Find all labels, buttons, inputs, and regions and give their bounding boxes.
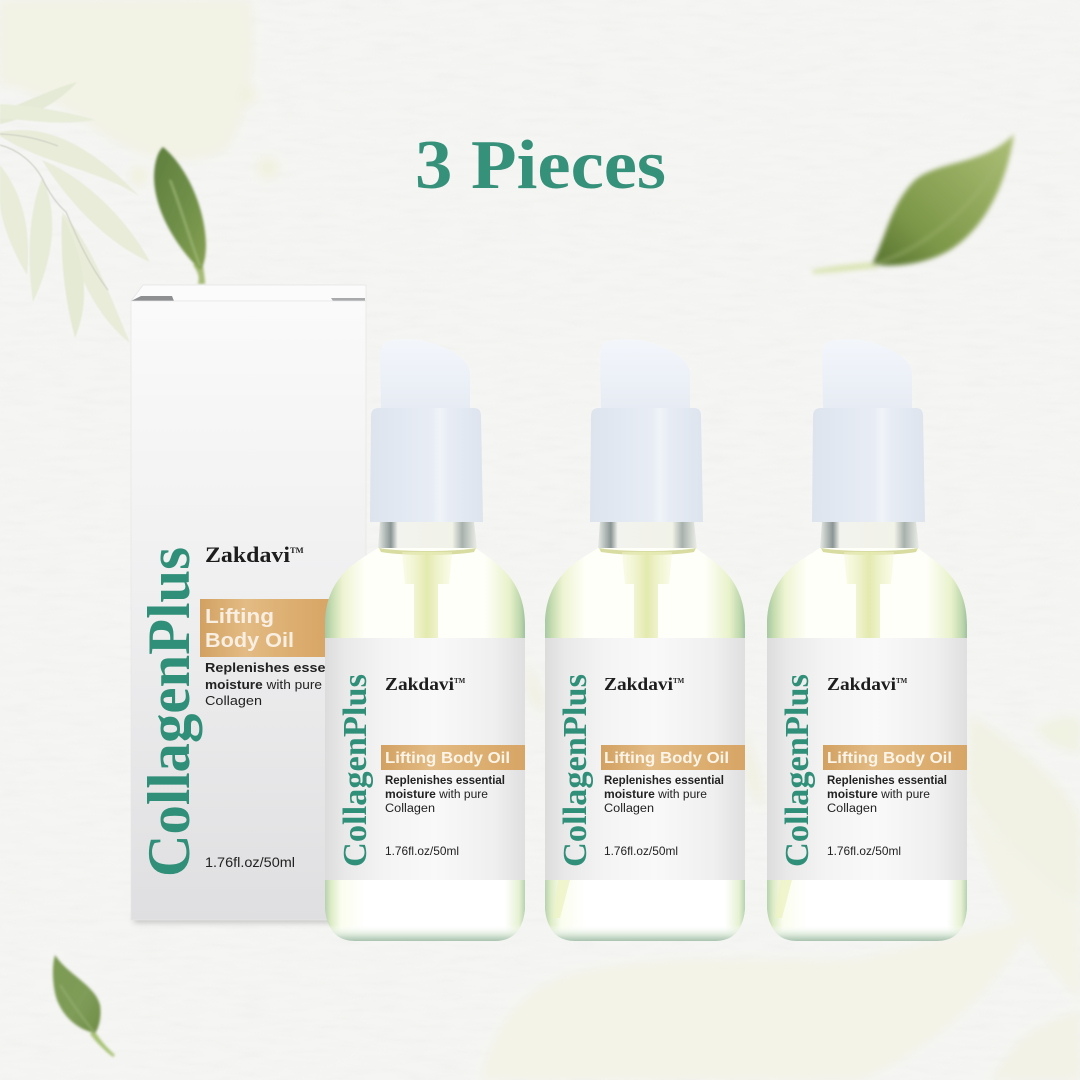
title: 3 Pieces: [415, 127, 666, 204]
label description: moisture with pure: [385, 789, 488, 801]
bottom rim: [549, 925, 741, 941]
box description: Collagen: [205, 694, 262, 708]
label description: [827, 775, 947, 815]
label description: [385, 775, 505, 815]
label brand vertical: CollagenPlus: [779, 674, 816, 867]
label description: moisture with pure: [827, 789, 930, 801]
label brand vertical: CollagenPlus: [557, 674, 594, 867]
box description: [205, 661, 355, 708]
box volume: 1.76fl.oz/50ml: [205, 855, 295, 870]
lower glass: [545, 880, 745, 941]
box orange band: Lifting: [205, 606, 274, 628]
bottle 3: [767, 339, 967, 941]
pump collar: [812, 408, 925, 522]
label: [767, 638, 967, 880]
shoulder liquid line: [821, 548, 918, 555]
pump collar: [370, 408, 483, 522]
label description: Replenishes essential: [827, 775, 947, 787]
label orange band: [381, 745, 525, 770]
bottle 2: [545, 339, 745, 941]
label orange band: [823, 745, 967, 770]
bottom rim: [771, 925, 963, 941]
box orange band: [200, 599, 330, 657]
label brand vertical: CollagenPlus: [337, 674, 374, 867]
box shadow: [134, 914, 369, 923]
glass body: [325, 548, 525, 941]
box brand vertical: CollagenPlus: [136, 547, 202, 877]
label: [325, 638, 525, 880]
pump head: [822, 339, 912, 408]
pump collar: [590, 408, 703, 522]
label volume: 1.76fl.oz/50ml: [604, 844, 678, 858]
icon: leaf bottom left: [53, 955, 115, 1057]
glass body: [767, 548, 967, 941]
shoulder liquid line: [379, 548, 476, 555]
label description: Collagen: [604, 803, 654, 815]
watercolor wash: top left: [0, 0, 279, 185]
label orange band: Lifting Body Oil: [385, 750, 510, 767]
box logo: Zakdavi: [205, 542, 290, 567]
box orange band: Body Oil: [205, 630, 294, 652]
botanical branch: top left: [0, 82, 150, 343]
box top flap: [131, 285, 366, 301]
pump head: [380, 339, 470, 408]
dip tube: [402, 552, 452, 638]
glass neck: [378, 522, 477, 549]
dip tube: [622, 552, 672, 638]
label description: Replenishes essential: [604, 775, 724, 787]
bottle 1: [325, 339, 525, 941]
label logo: Zakdavi: [604, 674, 673, 694]
glass neck: [598, 522, 697, 549]
label volume: 1.76fl.oz/50ml: [827, 844, 901, 858]
label orange band: Lifting Body Oil: [604, 750, 729, 767]
label orange band: [601, 745, 745, 770]
box logo: TM: [290, 545, 304, 555]
label logo: Zakdavi: [385, 674, 454, 694]
icon: leaf top left: [154, 147, 206, 284]
box front face: [131, 301, 366, 920]
label description: Replenishes essential: [385, 775, 505, 787]
icon: leaf top right: [812, 134, 1014, 274]
lower glass: [767, 880, 967, 941]
bottom rim: [329, 925, 521, 941]
label description: Collagen: [385, 803, 435, 815]
watercolor wash: bottom right: [480, 660, 1080, 1080]
box description: Replenishes essential: [205, 661, 355, 675]
lower glass: [325, 880, 525, 941]
label logo: TM: [896, 677, 908, 685]
box description: moisture with pure: [205, 678, 322, 692]
tube reflection: [775, 880, 792, 918]
pump head: [600, 339, 690, 408]
glass neck: [820, 522, 919, 549]
label description: [604, 775, 724, 815]
label orange band: Lifting Body Oil: [827, 750, 952, 767]
shoulder liquid line: [599, 548, 696, 555]
product box: [131, 285, 369, 923]
label logo: TM: [454, 677, 466, 685]
label logo: TM: [673, 677, 685, 685]
label: [545, 638, 745, 880]
label description: Collagen: [827, 803, 877, 815]
label description: moisture with pure: [604, 789, 707, 801]
label logo: Zakdavi: [827, 674, 896, 694]
dip tube: [844, 552, 894, 638]
tube reflection: [553, 880, 570, 918]
glass body: [545, 548, 745, 941]
label volume: 1.76fl.oz/50ml: [385, 844, 459, 858]
